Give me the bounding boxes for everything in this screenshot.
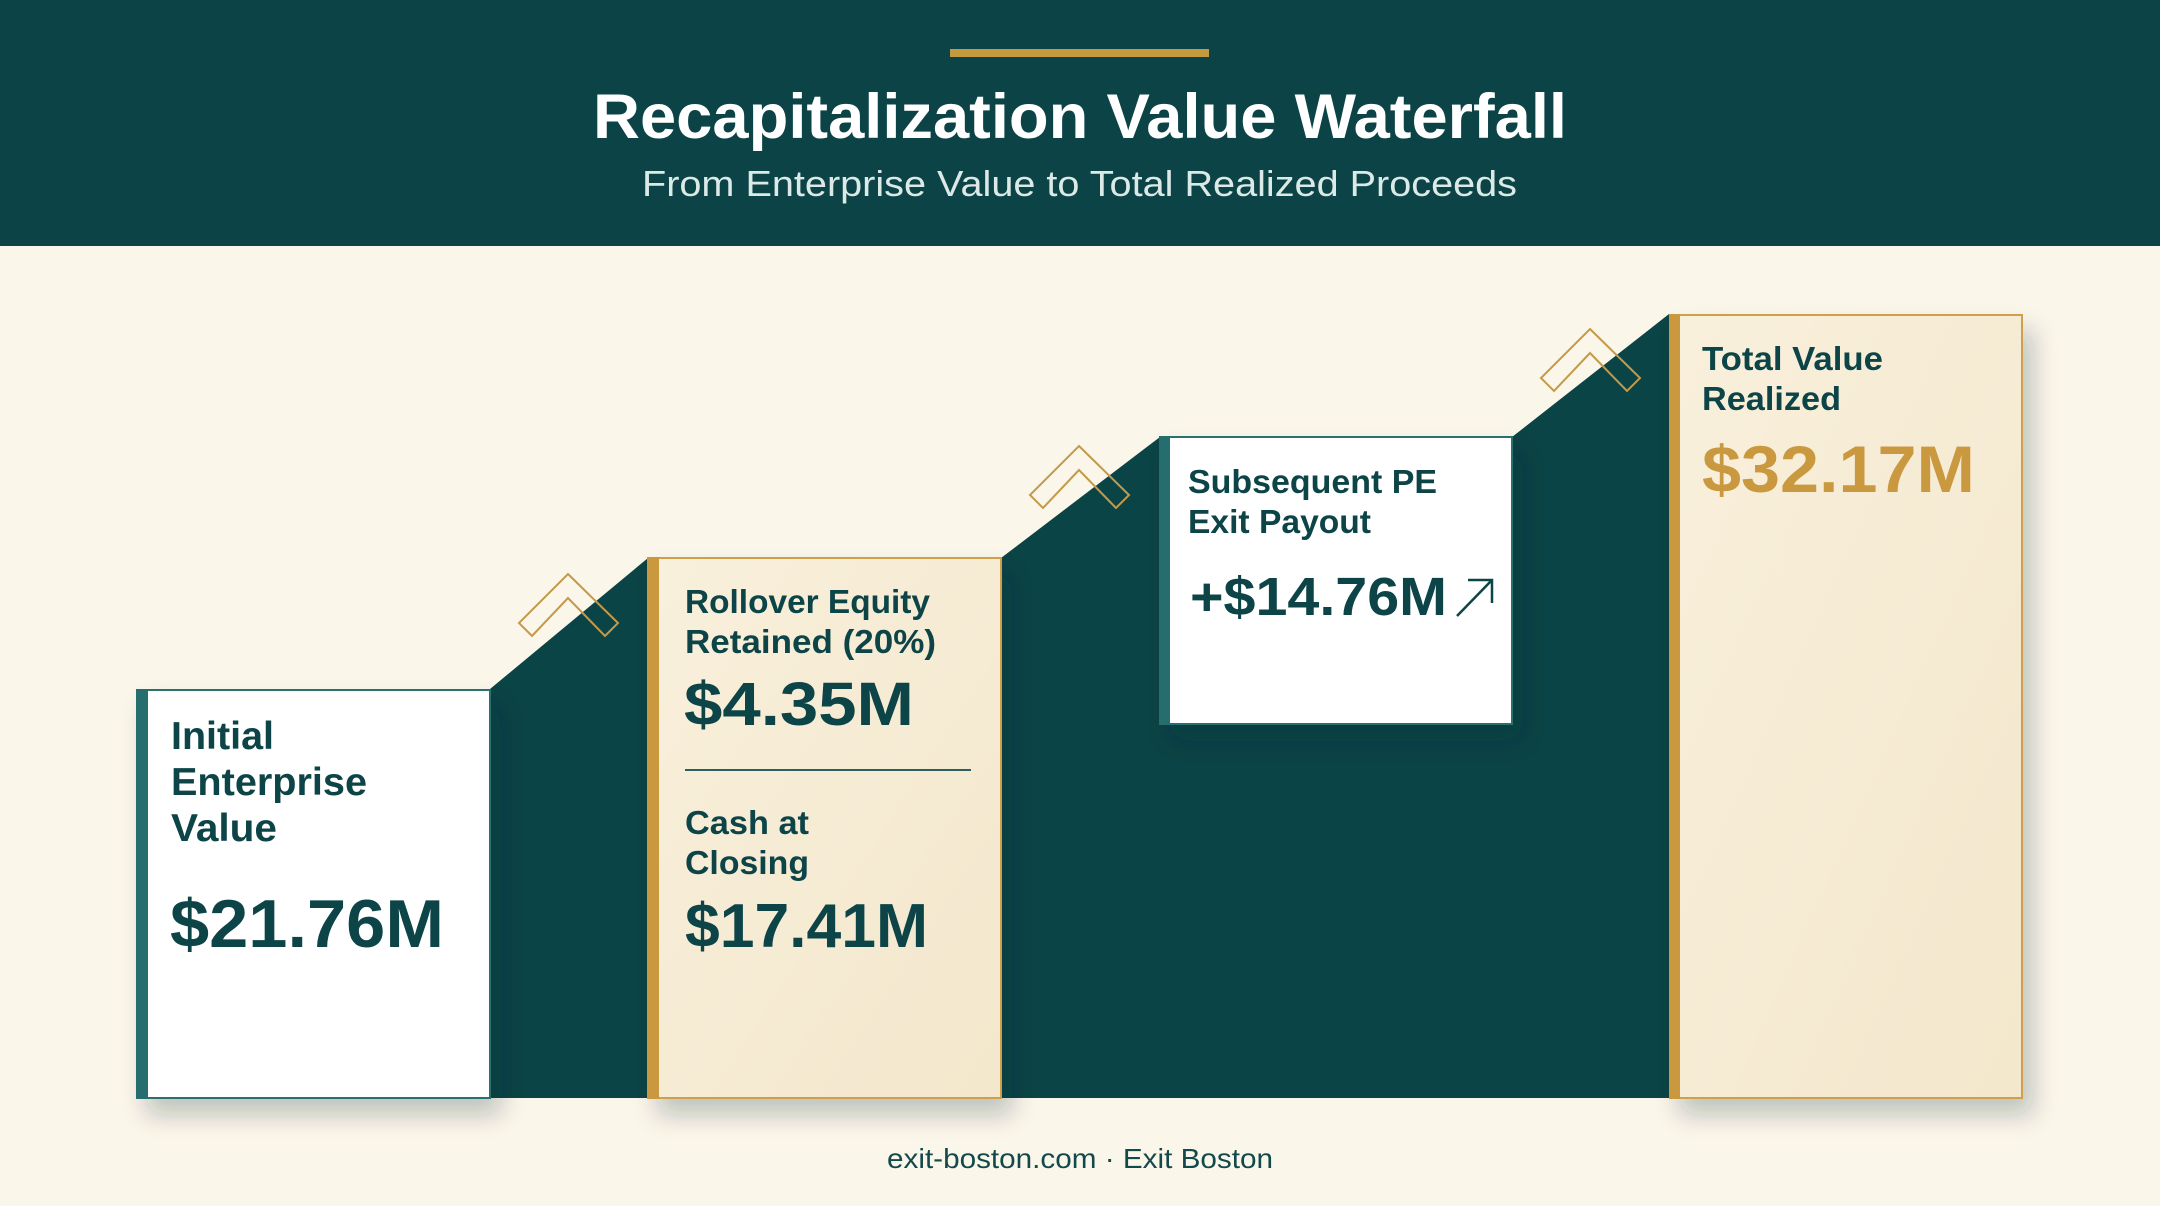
footer source: exit-boston.com · Exit Boston bbox=[887, 1143, 1273, 1174]
accent bar bbox=[950, 49, 1209, 57]
label: cash at closing: Cash at bbox=[685, 804, 809, 841]
title: Recapitalization Value Waterfall bbox=[593, 82, 1567, 152]
panel: subsequent PE exit payout bbox=[1159, 436, 1512, 725]
label: rollover equity retained: Rollover Equity bbox=[685, 583, 931, 620]
panel: total value realized bbox=[1669, 314, 2022, 1099]
label: initial enterprise value: Initial bbox=[171, 715, 274, 758]
panel: initial enterprise value bbox=[136, 689, 490, 1099]
label: total value realized bbox=[1702, 340, 1883, 417]
label: initial enterprise value: Enterprise bbox=[171, 761, 367, 804]
subtitle: From Enterprise Value to Total Realized Proceeds bbox=[642, 163, 1517, 204]
label: subsequent PE exit payout bbox=[1188, 463, 1437, 540]
panel: rollover and cash bbox=[647, 557, 1001, 1099]
waterfall stepped background bbox=[490, 314, 1669, 1098]
icon: chevron step 3 bbox=[1541, 329, 1640, 391]
icon: chevron step 1 bbox=[519, 574, 618, 636]
value: $21.76M: $21.76M bbox=[170, 886, 444, 962]
value: +$14.76M: +$14.76M bbox=[1190, 567, 1447, 627]
label: rollover equity retained: Retained (20%) bbox=[685, 623, 936, 660]
value: $32.17M: $32.17M bbox=[1702, 432, 1975, 506]
label: initial enterprise value: Value bbox=[171, 807, 277, 850]
icon: chevron step 2 bbox=[1030, 446, 1129, 508]
label: subsequent PE exit payout: Subsequent PE bbox=[1188, 463, 1437, 500]
label: total value realized: Realized bbox=[1702, 380, 1841, 417]
label: cash at closing: Closing bbox=[685, 844, 809, 881]
icon: up-right arrow bbox=[1457, 580, 1492, 616]
label: subsequent PE exit payout: Exit Payout bbox=[1188, 503, 1371, 540]
label: rollover equity retained bbox=[685, 583, 936, 660]
label: cash at closing bbox=[685, 804, 809, 881]
value: $4.35M: $4.35M bbox=[684, 670, 914, 738]
header banner bbox=[0, 0, 2160, 246]
label: initial enterprise value bbox=[171, 715, 367, 850]
value: $17.41M: $17.41M bbox=[685, 892, 928, 961]
label: total value realized: Total Value bbox=[1702, 340, 1883, 377]
